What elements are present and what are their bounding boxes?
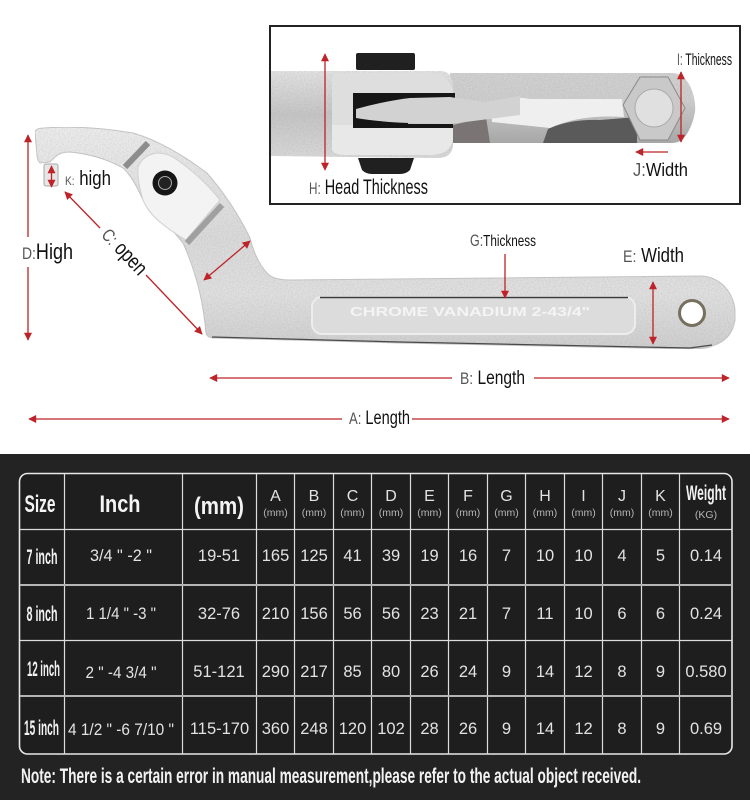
- row: 15 inch: 12: [574, 720, 593, 738]
- header row: (mm): [417, 507, 442, 519]
- row: 7 inch: [26, 546, 722, 569]
- fork lower plate: [332, 125, 453, 155]
- header row: Inch: [100, 491, 140, 518]
- header row: (mm): [263, 507, 288, 519]
- hex bolt cap: [635, 89, 673, 127]
- row: 7 inch: 165: [262, 547, 289, 565]
- hook pin: [44, 164, 58, 186]
- top bolt: [356, 53, 415, 70]
- pivot bolt: [152, 170, 178, 196]
- row: 12 inch: 80: [382, 663, 400, 681]
- row: 15 inch: 0.69: [690, 720, 722, 738]
- row: 15 inch: 28: [420, 720, 439, 738]
- row: 15 inch: 9: [656, 720, 665, 738]
- row: 8 inch: 32-76: [198, 605, 240, 623]
- handle groove with engraving: [312, 297, 635, 334]
- bottom edge shadow: [212, 337, 712, 348]
- row: 7 inch: 10: [536, 547, 554, 565]
- row: 12 inch: 217: [300, 663, 328, 681]
- header row: A: [270, 488, 281, 505]
- label: E width: E: Width: [623, 245, 684, 267]
- inner tongue: [356, 96, 520, 124]
- row: 12 inch: 85: [343, 663, 362, 681]
- row: 12 inch: 290: [262, 663, 289, 681]
- row: 8 inch: [26, 603, 722, 626]
- wrench illustration: [35, 127, 735, 349]
- fork slot: [353, 93, 455, 128]
- label: D high: D:High: [22, 239, 73, 264]
- dark patch on arm lower left: [453, 117, 490, 143]
- header row: (mm): [533, 507, 557, 519]
- header row: G: [500, 488, 513, 505]
- handle hole: [680, 300, 704, 326]
- header row: (mm): [571, 507, 596, 519]
- row: 7 inch: 125: [300, 547, 328, 565]
- arrow: C open: [65, 192, 202, 334]
- header row: Size: [24, 491, 56, 518]
- row: 8 inch: 0.24: [690, 605, 722, 623]
- dark patch on arm lower right: [543, 117, 637, 143]
- row: 15 inch: 26: [459, 720, 477, 738]
- row: 12 inch: 51-121: [193, 663, 245, 681]
- hex bolt: [623, 77, 685, 140]
- head: [271, 71, 453, 158]
- row: 7 inch: 19: [420, 547, 439, 565]
- row: 12 inch: 9: [502, 663, 511, 681]
- row: 15 inch: 14: [536, 720, 554, 738]
- header row: E: [424, 488, 435, 505]
- row: 8 inch: 23: [420, 605, 439, 623]
- label: A length: A: Length: [349, 408, 410, 429]
- row: 8 inch: 7: [502, 605, 511, 623]
- row: 12 inch: 12 inch: [27, 658, 60, 681]
- row: 8 inch: 6: [656, 605, 665, 623]
- arrow: K high: [50, 166, 52, 187]
- label: C open: C: open: [97, 223, 152, 280]
- header row: (mm): [494, 507, 519, 519]
- row: 7 inch: 7 inch: [26, 546, 58, 569]
- header row: [24, 482, 726, 521]
- header row: (mm): [648, 507, 673, 519]
- row: 12 inch: 24: [459, 663, 477, 681]
- row: 7 inch: 10: [574, 547, 593, 565]
- row: 8 inch: 11: [536, 605, 554, 623]
- row: 7 inch: 7: [502, 547, 511, 565]
- row: 8 inch: 56: [343, 605, 362, 623]
- row: 7 inch: 41: [343, 547, 362, 565]
- header row: F: [463, 488, 473, 505]
- row: 12 inch: 12: [574, 663, 593, 681]
- panel: specification table: [0, 454, 750, 800]
- row: 15 inch: 4 1/2 " -6 7/10 ": [68, 721, 174, 739]
- row: 7 inch: 4: [617, 547, 627, 565]
- label: H head thickness: H: Head Thickness: [309, 176, 428, 199]
- wrench body: [35, 127, 735, 349]
- row: 15 inch: 248: [300, 720, 328, 738]
- row: 15 inch: 102: [377, 720, 405, 738]
- row: 8 inch: 8 inch: [26, 603, 58, 626]
- bottom bolt: [358, 158, 414, 174]
- header row: H: [539, 488, 551, 505]
- inset panel: head detail: [270, 26, 740, 204]
- header row: B: [309, 488, 319, 505]
- row: 7 inch: 19-51: [198, 547, 240, 565]
- pivot plate: [138, 153, 220, 240]
- row: 15 inch: 120: [339, 720, 366, 738]
- row: 7 inch: 0.14: [690, 547, 722, 565]
- row: 15 inch: 360: [262, 720, 289, 738]
- arrow: E width: [652, 282, 654, 344]
- arrow: B length: [210, 377, 729, 379]
- row: 7 inch: 16: [459, 547, 477, 565]
- row: 12 inch: 26: [420, 663, 439, 681]
- row: 7 inch: 5: [656, 547, 665, 565]
- header row: C: [347, 488, 358, 505]
- arrow: J width: [636, 151, 668, 153]
- row: 15 inch: 15 inch: [24, 717, 59, 740]
- row: 15 inch: 9: [502, 720, 511, 738]
- row: 8 inch: 156: [300, 605, 328, 623]
- header row: (mm): [340, 507, 365, 519]
- header row: J: [618, 488, 626, 505]
- row: 7 inch: 3/4 " -2 ": [90, 547, 152, 565]
- bright patch on arm: [490, 98, 624, 128]
- row: 12 inch: 8: [617, 663, 627, 681]
- row: 8 inch: 6: [617, 605, 627, 623]
- label: B length: B: Length: [460, 368, 525, 389]
- row: 8 inch: 21: [459, 605, 477, 623]
- arm: [450, 73, 695, 143]
- row: 8 inch: 1 1/4 " -3 ": [86, 605, 156, 623]
- row: 8 inch: 56: [382, 605, 400, 623]
- table frame: [20, 474, 732, 754]
- arrow: H head thickness: [324, 54, 326, 170]
- row: 12 inch: 0.580: [685, 663, 727, 681]
- row: 12 inch: 14: [536, 663, 554, 681]
- header row: (mm): [379, 507, 403, 519]
- arrow: I thickness: [680, 72, 682, 142]
- label: J width: J:Width: [633, 160, 688, 180]
- header row: (KG): [695, 509, 717, 521]
- arrow: F width: [204, 241, 250, 280]
- handle groove with engraving: CHROME VANADIUM 2-43/4": [350, 304, 590, 319]
- header row: K: [655, 488, 666, 505]
- row: 12 inch: [27, 658, 727, 682]
- label: G thickness: G:Thickness: [470, 231, 536, 250]
- row: 12 inch: 2 " -4 3/4 ": [86, 664, 157, 682]
- grooves: [125, 143, 148, 167]
- row: 7 inch: 39: [382, 547, 400, 565]
- row: 15 inch: 8: [617, 720, 627, 738]
- header row: (mm): [456, 507, 480, 519]
- header row: I: [581, 488, 586, 505]
- arrow: A length: [29, 418, 729, 420]
- arrow: G thickness: [504, 254, 506, 298]
- label: K high: K: high: [65, 168, 111, 190]
- header row: (mm): [302, 507, 326, 519]
- row: 8 inch: 210: [262, 605, 289, 623]
- row: 15 inch: [24, 717, 722, 740]
- arrow: D high: [27, 135, 29, 340]
- fork upper plate: [332, 73, 453, 125]
- header row: (mm): [610, 507, 634, 519]
- row: 8 inch: 10: [574, 605, 593, 623]
- header row: (mm): [194, 493, 244, 520]
- row: 15 inch: 115-170: [190, 720, 249, 738]
- header row: D: [385, 488, 397, 505]
- row: 12 inch: 9: [656, 663, 665, 681]
